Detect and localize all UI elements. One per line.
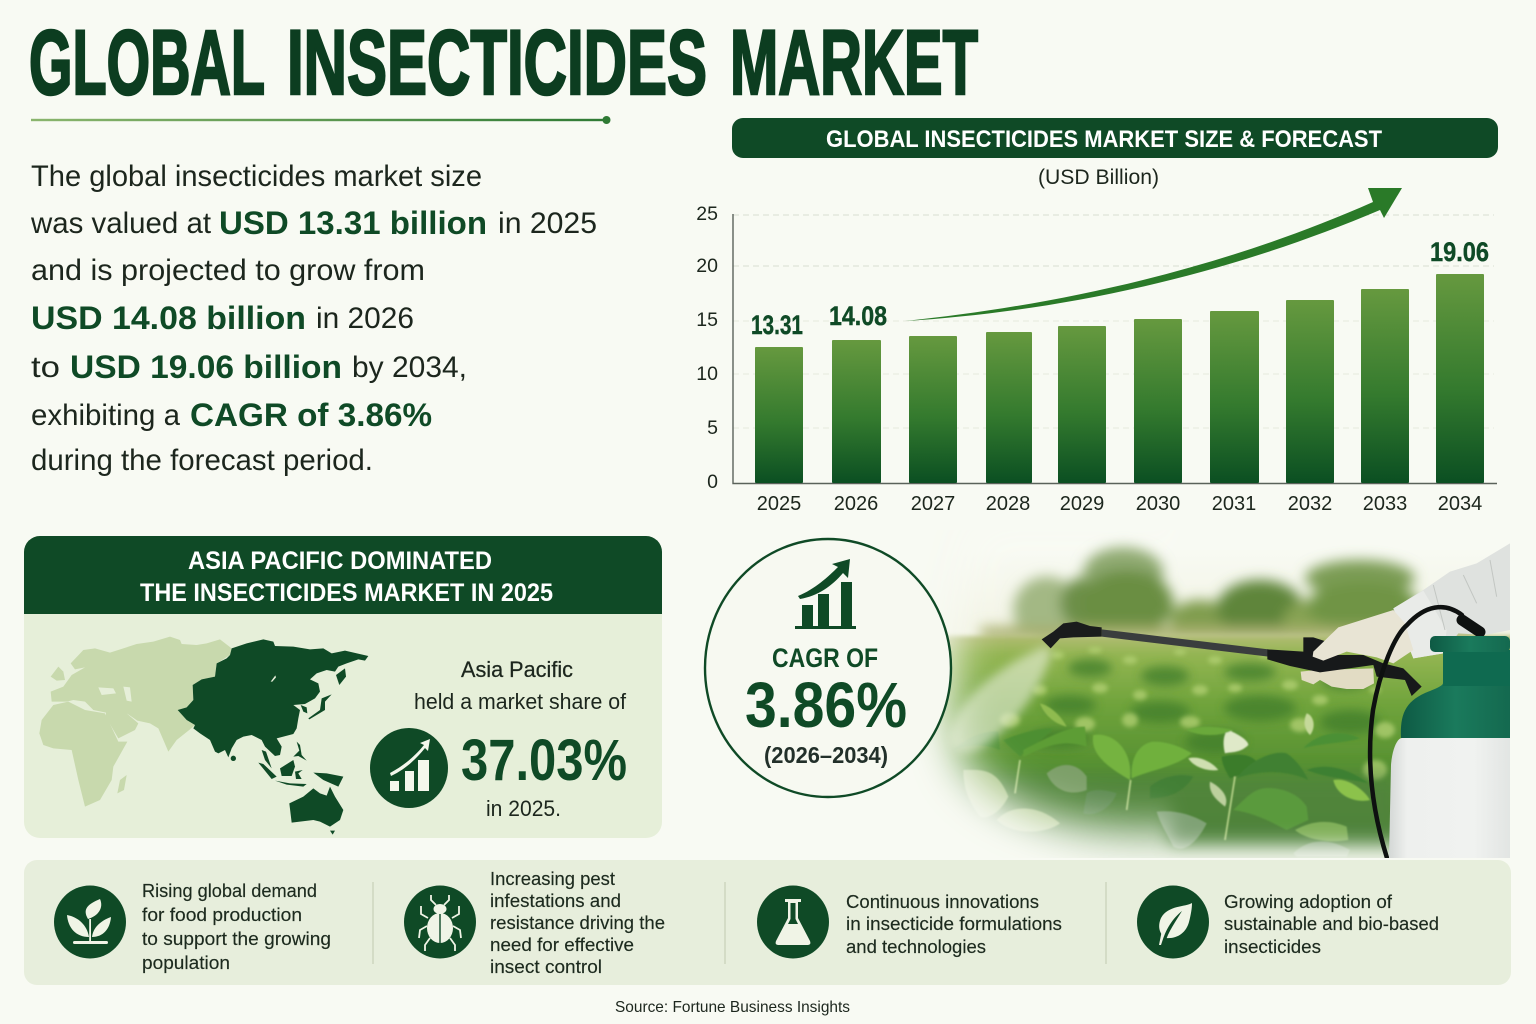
field mid-ground foliage — [1030, 659, 1380, 754]
panel heading: ASIA PACIFIC DOMINATED — [188, 547, 492, 575]
share text: held a market share of — [414, 689, 627, 714]
Asia highlighted — [178, 639, 368, 757]
panel: market drivers — [24, 860, 1511, 985]
chart heading bar: GLOBAL INSECTICIDES MARKET SIZE & FORECAST — [826, 126, 1382, 153]
driver text: bio-based: insecticides — [1224, 936, 1321, 957]
icon: seedling — [54, 886, 126, 958]
driver text: pests: infestations and — [490, 890, 621, 911]
share text — [414, 657, 627, 821]
spray gun grip — [1267, 637, 1422, 696]
source note: Source: Fortune Business Insights — [615, 999, 850, 1016]
year labels: 2025 — [757, 493, 801, 515]
growth arrow — [905, 188, 1402, 321]
year labels: 2030 — [1136, 493, 1180, 515]
title: INSECTICIDES — [287, 12, 707, 114]
driver text: bio-based — [1224, 891, 1439, 957]
chart heading bar — [732, 118, 1498, 158]
year labels: 2026 — [834, 493, 878, 515]
year labels: 2032 — [1288, 493, 1332, 515]
chart unit label: (USD Billion) — [1038, 166, 1159, 189]
driver text: pests: need for effective — [490, 934, 634, 955]
CAGR value: 3.86% — [745, 669, 907, 741]
field — [926, 632, 1510, 858]
driver text: pests: resistance driving the — [490, 912, 665, 933]
intro text block: by 2034, — [352, 351, 467, 384]
icon: growth chart badge — [370, 728, 448, 808]
driver text: food demand: to support the growing — [142, 928, 331, 949]
panel: Asia Pacific — [24, 536, 662, 838]
year labels: 2031 — [1212, 493, 1256, 515]
sleeve — [1393, 543, 1510, 658]
year labels: 2033 — [1363, 493, 1407, 515]
CAGR label: CAGR OF — [772, 643, 878, 673]
value labels: 13.31 — [751, 310, 803, 340]
intro text block: in 2026 — [316, 302, 414, 335]
bar chart: 15 — [696, 309, 718, 331]
title: GLOBAL — [29, 12, 265, 114]
islands — [231, 668, 346, 835]
sprayer and operator — [1042, 543, 1510, 696]
intro text block — [30, 160, 597, 477]
icon: leaf — [1137, 886, 1209, 958]
value labels: 14.08 — [829, 301, 887, 331]
foreground leaves — [953, 703, 1370, 857]
driver text: pests: insect control — [490, 956, 602, 977]
spray mist — [949, 646, 1052, 753]
intro text block: USD 14.08 billion — [31, 300, 306, 336]
bars — [755, 274, 1484, 483]
intro text block: exhibiting a — [31, 399, 181, 432]
intro text block: USD 19.06 billion — [70, 349, 342, 385]
wand — [1102, 629, 1268, 657]
CAGR badge — [705, 539, 951, 797]
driver text: food demand: population — [142, 952, 230, 973]
Britain — [51, 667, 65, 681]
upper glove — [1313, 610, 1413, 663]
driver text: innovation: in insecticide formulations — [846, 913, 1062, 934]
panel heading — [140, 547, 553, 607]
icon: rising bars — [795, 559, 856, 629]
title — [29, 12, 978, 114]
intro text block: USD 13.31 billion — [219, 205, 487, 241]
driver text: food demand: Rising global demand — [142, 880, 317, 901]
intro text block: The global insecticides market size — [31, 160, 482, 193]
title: MARKET — [730, 12, 978, 114]
driver text: pests: Increasing pest — [490, 868, 615, 889]
value labels: 19.06 — [1430, 237, 1489, 267]
bar chart — [696, 203, 1497, 515]
intro text block: and is projected to grow from — [31, 254, 425, 287]
driver text: bio-based: Growing adoption of — [1224, 891, 1393, 912]
CAGR period: (2026–2034) — [764, 742, 888, 768]
driver text: innovation — [846, 891, 1062, 957]
share text: in 2025. — [486, 796, 561, 821]
bar chart: 0 — [707, 471, 718, 493]
driver text: pests — [490, 868, 665, 977]
bar chart: 25 — [696, 203, 718, 225]
foreground shade — [1077, 768, 1389, 825]
sprayer tank — [1389, 636, 1510, 858]
icon: beetle — [404, 886, 476, 958]
share text: Asia Pacific — [461, 657, 573, 682]
intro text block: CAGR of 3.86% — [190, 397, 432, 433]
bar chart: 5 — [707, 417, 718, 439]
intro text block: to — [31, 351, 60, 384]
year labels: 2034 — [1438, 493, 1482, 515]
Africa — [39, 702, 127, 807]
intro text block: in 2025 — [498, 207, 597, 240]
year labels: 2027 — [911, 493, 955, 515]
world map — [39, 637, 368, 835]
intro text block: was valued at — [30, 207, 211, 240]
distant trees — [980, 547, 1480, 643]
driver text: innovation: Continuous innovations — [846, 891, 1039, 912]
icon: flask — [757, 886, 829, 958]
photo: crop field being sprayed — [926, 538, 1510, 858]
driver text: bio-based: sustainable and bio-based — [1224, 913, 1439, 934]
intro text block: during the forecast period. — [31, 444, 373, 477]
hose — [1370, 607, 1480, 858]
Europe and western Asia — [51, 637, 232, 752]
year labels: 2028 — [986, 493, 1030, 515]
lower glove fingers — [1301, 668, 1374, 689]
bar chart: 20 — [696, 255, 718, 277]
bar chart: 10 — [696, 363, 718, 385]
driver text: food demand — [142, 880, 331, 973]
panel heading: THE INSECTICIDES MARKET IN 2025 — [140, 579, 553, 607]
market share value: 37.03% — [461, 728, 627, 793]
Madagascar — [117, 775, 127, 793]
driver text: innovation: and technologies — [846, 936, 986, 957]
value labels — [751, 237, 1489, 340]
driver text: food demand: for food production — [142, 904, 302, 925]
year labels: 2029 — [1060, 493, 1104, 515]
year labels — [757, 493, 1482, 515]
title rule with end dot — [31, 116, 610, 124]
